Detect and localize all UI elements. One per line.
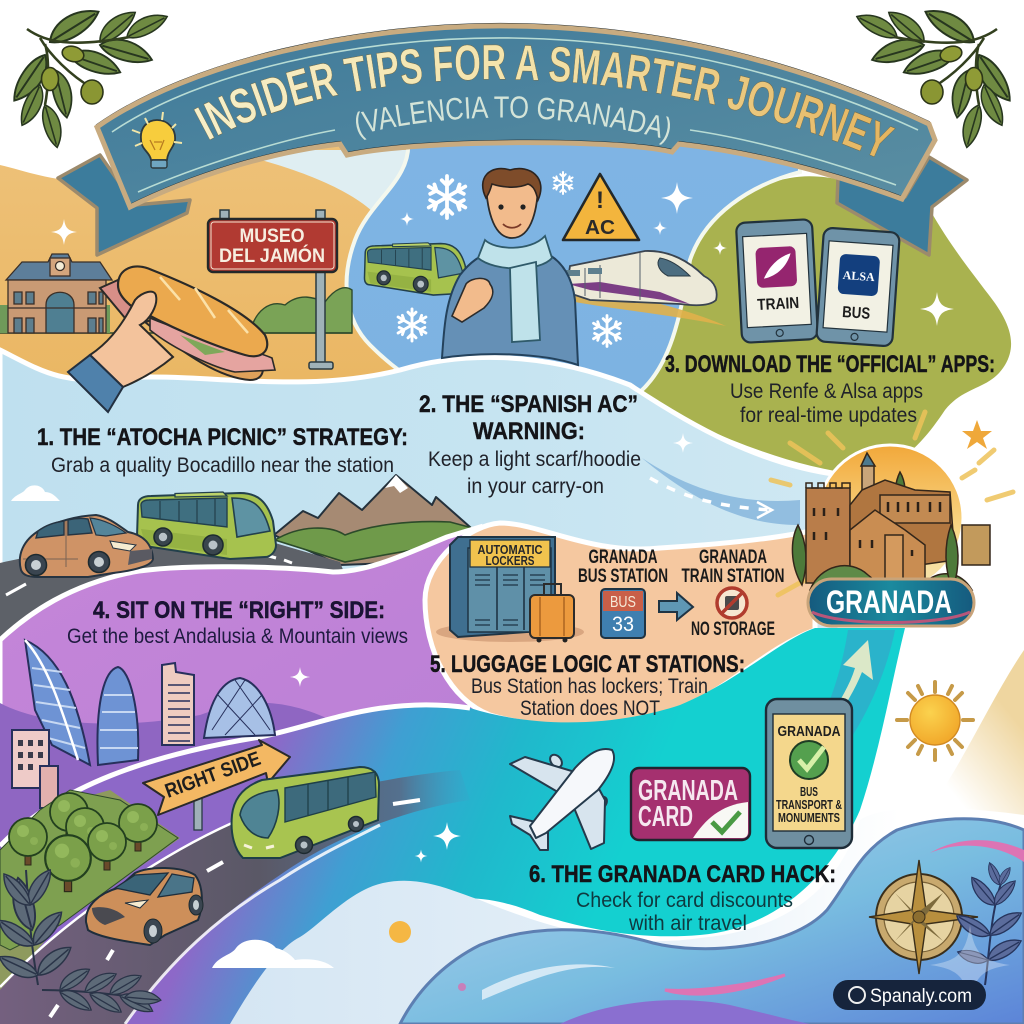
icon: striped tower [162, 663, 194, 745]
icon: cloud [11, 485, 60, 501]
panel: tip 3 olive background [620, 176, 1011, 475]
panel art: tip 4 skyline [12, 640, 310, 808]
icon: bus 33 sign: BUS [610, 594, 636, 611]
panel art: tip 5 lockers [436, 537, 784, 642]
icon: star [962, 420, 992, 449]
tip 4 text: 4. SIT ON THE “RIGHT” SIDE: [93, 597, 385, 624]
tree cluster [9, 793, 157, 892]
icon: car [20, 515, 153, 577]
panel: light blue journey band [0, 350, 840, 660]
panel art: tip 3 phones [713, 219, 954, 347]
icon: snowflake [594, 316, 620, 346]
icon: bus [137, 492, 276, 559]
icon: AC warning triangle: ! [596, 187, 604, 214]
station labels: TRAIN STATION [682, 566, 784, 587]
tip 6 text: with air travel [628, 912, 747, 935]
icon: AC warning triangle: AC [585, 217, 615, 239]
icon: phone with Alsa bus app: BUS [842, 304, 871, 323]
station labels: GRANADA [588, 547, 658, 568]
icon: olive branch left [7, 2, 170, 149]
road edge lines and dashes [0, 800, 420, 1024]
panel art: tip 4 sign [143, 740, 290, 830]
watermark pill [833, 980, 986, 1010]
icon: olive branch right [854, 2, 1017, 149]
icon: lattice dome [204, 678, 275, 738]
panel art: tip 1 vehicles [20, 492, 276, 577]
tip 1 text: Grab a quality Bocadillo near the station [51, 454, 394, 477]
icon: sparkle [920, 292, 954, 326]
panel: tip 6 teal background [0, 628, 905, 1024]
icon: laurel sprig, right [953, 861, 1024, 985]
panel art: tip 6 [510, 682, 1024, 1010]
icon: bocadillo sandwich in hand [68, 266, 275, 412]
icon: bus [364, 243, 467, 295]
icon: Granada card: CARD [638, 801, 693, 833]
icon: sparkle [51, 219, 77, 245]
icon: sparkle [400, 212, 414, 226]
Granada destination emblem [771, 412, 1013, 626]
icon: phone with Renfe train app [736, 219, 818, 343]
icon: snowflake [398, 309, 426, 341]
panel art: tip 4 trees [0, 790, 178, 950]
panel: lower right corner tint [925, 650, 1024, 815]
panel: road verge, lower left [0, 790, 180, 1024]
icon: phone with Renfe train app: TRAIN [757, 295, 800, 314]
road dashes, upper [6, 554, 292, 595]
tip 1 text [37, 424, 408, 477]
icon: phone with Granada pass: MONUMENTS [778, 811, 840, 825]
icon: station building [0, 254, 112, 333]
icon: arrow [659, 593, 693, 620]
grass verge [0, 790, 178, 950]
title banner: (VALENCIA TO GRANADA) [356, 96, 670, 145]
arrow up to Granada [805, 630, 895, 760]
subtitle text [357, 118, 668, 140]
panel: pale sky behind banner [220, 150, 420, 225]
sign: Museo del Jamón: MUSEO [240, 226, 304, 247]
icon: large bus [232, 767, 379, 858]
title text [208, 79, 908, 172]
panel: lower blue wave [400, 819, 1024, 1024]
banner body [97, 24, 935, 205]
icon: automatic lockers [436, 537, 584, 642]
Alhambra castle [792, 453, 990, 590]
mountains and hills [274, 475, 480, 565]
tip 6 text: Check for card discounts [576, 889, 793, 912]
icon: phone with Granada pass [766, 699, 852, 848]
icon: bus 33 sign [601, 589, 645, 638]
station labels [578, 547, 784, 640]
panel: tip 1 sand background [0, 130, 420, 400]
sun rays [771, 412, 1013, 595]
icon: cloud, lower [212, 940, 334, 968]
icon: light bulb [132, 112, 182, 168]
panel: tip 5 peach background [425, 523, 815, 726]
icon: suitcase [530, 584, 574, 642]
ground line [0, 332, 352, 334]
icon: large car [86, 868, 203, 945]
icon: phone with Alsa bus app [816, 227, 900, 347]
tip 1 text: 1. THE “ATOCHA PICNIC” STRATEGY: [37, 424, 408, 451]
person wearing scarf [442, 169, 578, 365]
sign: Museo del Jamón [208, 210, 337, 369]
signpost [194, 795, 202, 830]
icon: snowflake [429, 176, 465, 218]
panel: tip 4 purple background [0, 527, 500, 860]
icon: pale sparkle [930, 925, 1010, 1005]
tip 5 text: Bus Station has lockers; Train [471, 675, 708, 698]
name badge: GRANADA [826, 584, 952, 620]
icon: phone with Granada pass: GRANADA [778, 724, 841, 740]
tip 2 text: in your carry-on [467, 475, 604, 498]
icon: laurel sprig, vertical [0, 866, 75, 985]
icon: no storage [717, 588, 747, 618]
panel: tip 2 blue background [347, 140, 800, 392]
icon: sparkle [713, 241, 727, 255]
station labels: BUS STATION [578, 566, 668, 587]
icon: sun [897, 682, 973, 760]
icon: automatic lockers: AUTOMATIC [478, 543, 542, 557]
tip 3 text: Use Renfe & Alsa apps [730, 380, 923, 403]
icon: sparkle [653, 221, 667, 235]
road, upper [0, 542, 345, 645]
title banner: INSIDER TIPS FOR A SMARTER JOURNEY [194, 44, 896, 158]
icon: oval tower [97, 667, 138, 765]
tip 3 text: for real-time updates [740, 404, 917, 427]
icon: Granada card: GRANADA [638, 775, 738, 807]
tip 6 text: 6. THE GRANADA CARD HACK: [529, 861, 836, 888]
icon: phone with Granada pass: BUS [800, 785, 818, 799]
icon: high speed train [566, 251, 726, 326]
icon: phone with Granada pass: TRANSPORT & [776, 798, 842, 812]
panel art: tip 1 [0, 210, 352, 412]
tip 5 text [430, 651, 745, 720]
sun disc [817, 445, 963, 591]
icon: bus 33 sign: 33 [612, 613, 634, 636]
icon: airplane [510, 749, 614, 850]
tip 6 text [529, 861, 836, 935]
station labels: GRANADA [699, 547, 767, 568]
tip 3 text [665, 351, 995, 427]
icon: small sun [389, 921, 411, 943]
tip 5 text: Station does NOT [520, 697, 660, 720]
tip 2 text: Keep a light scarf/hoodie [428, 448, 641, 471]
bushes behind sign [250, 288, 352, 333]
tip 4 text [67, 597, 408, 648]
tip 4 text: Get the best Andalusia & Mountain views [67, 625, 408, 648]
watermark pill: Spanaly.com [870, 986, 972, 1007]
icons: sparkles, lower [414, 433, 693, 862]
name badge [808, 579, 974, 626]
dot [458, 983, 466, 991]
icon: sparkle [290, 667, 310, 687]
panel art: tip 2 [364, 169, 726, 365]
tip 2 text [419, 391, 641, 498]
icon: laurel sprig, horizontal [42, 963, 162, 1017]
sign: Museo del Jamón: DEL JAMÓN [219, 245, 325, 267]
tip 2 text: 2. THE “SPANISH AC” [419, 391, 638, 418]
icon: Granada card [631, 768, 750, 840]
flow swoosh with dashed arrow [642, 458, 800, 525]
panel: pale wave, lower [230, 808, 1024, 1024]
icon: automatic lockers: LOCKERS [486, 554, 534, 568]
road, lower [0, 770, 470, 1024]
ribbon tail left [58, 155, 190, 255]
icon: AC warning triangle [563, 174, 639, 240]
distant purple hills [0, 703, 335, 860]
icon: phone with Alsa bus app: ALSA [842, 268, 876, 284]
tip 5 text: 5. LUGGAGE LOGIC AT STATIONS: [430, 651, 745, 678]
ribbon tail right [837, 157, 967, 255]
white wave divider [0, 705, 470, 846]
wave accents, pink and purple [482, 840, 1024, 1024]
icon: sparkle [661, 182, 693, 214]
icon: pink blocks [12, 730, 58, 808]
icon: curved tower [25, 640, 90, 765]
icon: compass [869, 860, 978, 974]
icon: snowflake [553, 172, 573, 194]
right side arrow sign [143, 740, 290, 815]
station labels: NO STORAGE [691, 619, 775, 640]
title banner [56, 22, 969, 257]
panel art: tip 4 sign: RIGHT SIDE [162, 748, 264, 803]
tip 2 text: WARNING: [473, 418, 585, 445]
